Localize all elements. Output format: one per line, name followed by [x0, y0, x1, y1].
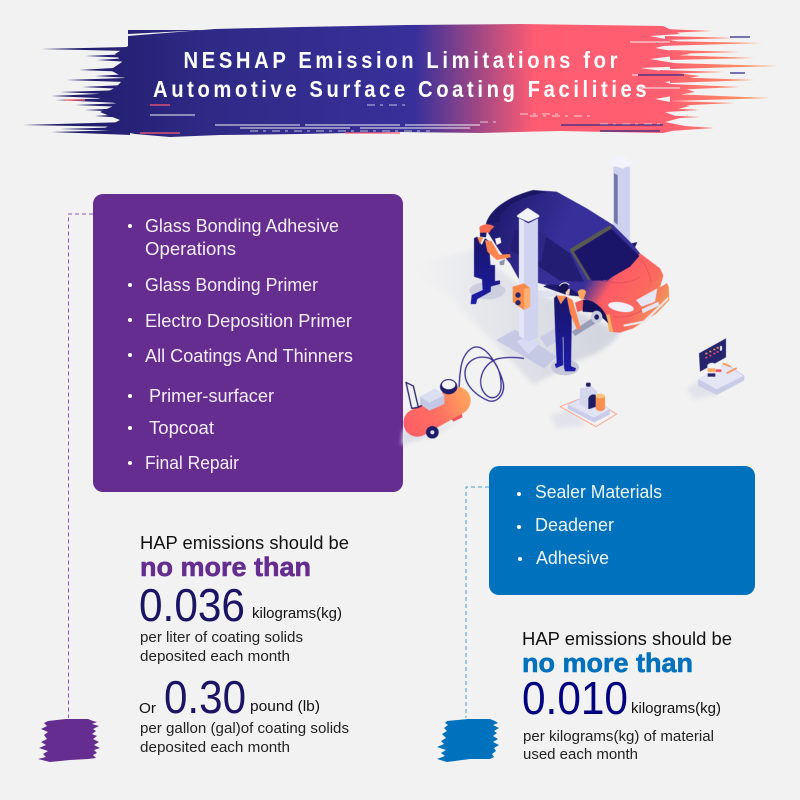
floor shadows	[402, 249, 717, 445]
worker ground shadows	[469, 282, 579, 375]
panel: purple coating list: Operations	[145, 238, 236, 259]
title: NESHAP Emission Limitations for	[184, 47, 618, 73]
right emission text block: HAP emissions should be	[522, 628, 732, 649]
connector: purple dashed line	[68, 214, 93, 718]
left emission text block: deposited each month	[140, 740, 290, 756]
left emission text block: per liter of coating solids	[140, 630, 303, 646]
right emission text block: 0.010	[522, 672, 628, 724]
title: Automotive Surface Coating Facilities	[153, 76, 647, 102]
panel: purple coating list: All Coatings And Thinners	[145, 345, 353, 366]
left emission text block: kilograms(kg)	[252, 605, 342, 622]
worker standing	[554, 282, 586, 371]
chemical bottle station	[560, 383, 617, 427]
panel: purple coating list: Final Repair	[145, 452, 239, 473]
panel: purple coating list: Topcoat	[149, 417, 214, 438]
blue brush swatch	[437, 719, 499, 762]
panel: purple coating list: Electro Deposition Primer	[145, 310, 352, 331]
left emission text block: 0.036	[139, 579, 245, 631]
panel: blue materials list: Deadener	[535, 514, 614, 535]
right emission text block	[522, 628, 732, 763]
car	[486, 190, 669, 336]
air compressor	[406, 379, 462, 439]
panel: purple coating list: Primer-surfacer	[149, 385, 274, 406]
air hose	[459, 347, 524, 403]
panel: purple coating list	[93, 194, 403, 492]
left emission text block: per gallon (gal)of coating solids	[140, 721, 349, 737]
panel: blue materials list: Sealer Materials	[535, 481, 662, 502]
front lift pillar and platform	[498, 209, 573, 367]
panel: purple coating list: Glass Bonding Adhesive	[145, 215, 339, 236]
left emission text block: Or	[139, 700, 156, 717]
title banner brush stroke	[23, 24, 778, 137]
left emission text block: deposited each month	[140, 649, 290, 665]
left emission text block: pound (lb)	[250, 698, 320, 715]
left emission text block: no more than	[140, 552, 311, 582]
right emission text block: no more than	[522, 648, 693, 678]
illustration: car repair workshop	[402, 156, 743, 445]
right emission text block: used each month	[523, 747, 638, 763]
panel: blue materials list	[489, 466, 755, 595]
paint colour station	[699, 338, 743, 394]
panel: blue materials list: Adhesive	[536, 547, 609, 568]
left emission text block: 0.30	[164, 671, 246, 723]
connector: blue dashed line	[466, 487, 489, 718]
worker kneeling	[471, 224, 511, 304]
left emission text block	[139, 532, 349, 756]
right emission text block: kilograms(kg)	[631, 700, 721, 717]
back lift pillar	[611, 156, 631, 243]
left emission text block: HAP emissions should be	[140, 532, 349, 553]
orange control box	[513, 283, 530, 310]
purple brush swatch	[38, 719, 100, 762]
right emission text block: per kilograms(kg) of material	[523, 729, 714, 745]
title	[153, 47, 647, 102]
panel: purple coating list: Glass Bonding Primer	[145, 274, 318, 295]
